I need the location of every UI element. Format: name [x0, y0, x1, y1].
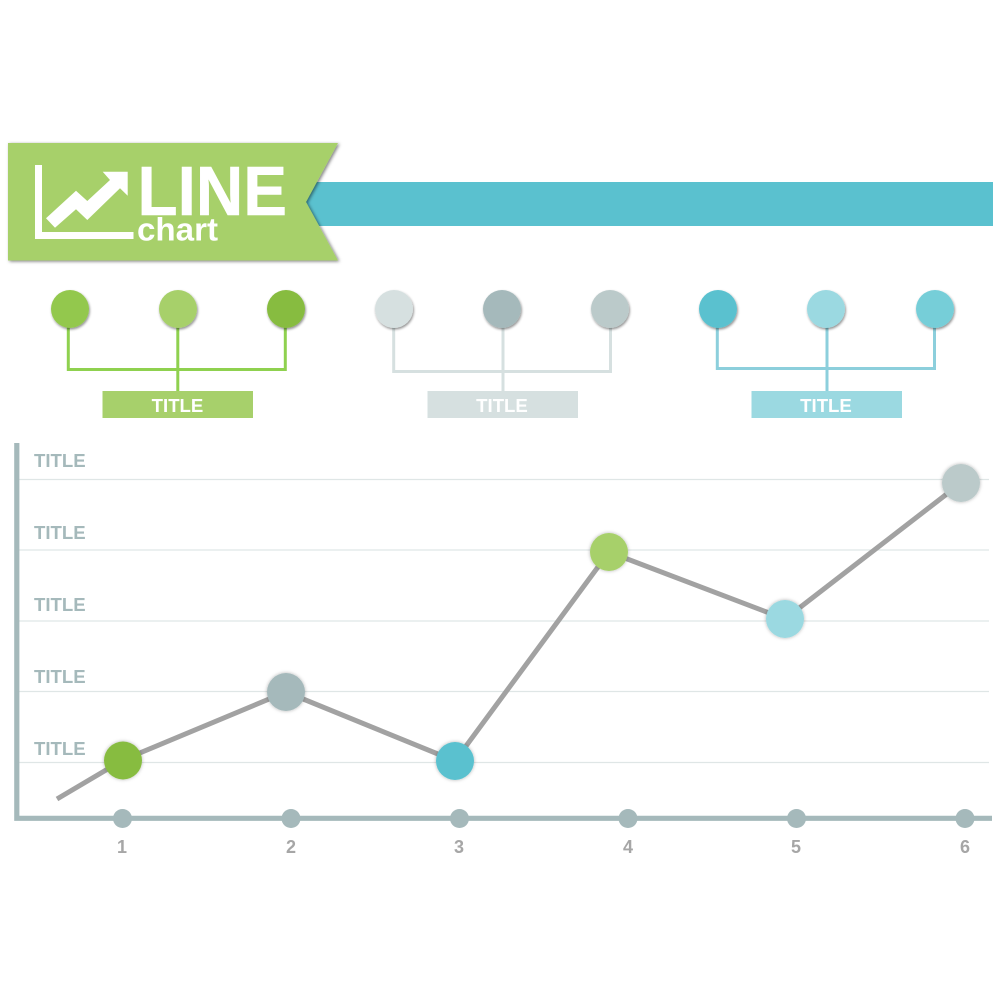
legend group: teal	[699, 290, 954, 418]
x axis labels: 6	[960, 837, 970, 857]
y axis labels: TITLE	[34, 666, 86, 687]
legend group: teal: TITLE	[800, 395, 852, 416]
y axis labels: TITLE	[34, 738, 86, 759]
x axis ticks	[113, 809, 974, 828]
legend group: grey: TITLE	[476, 395, 528, 416]
legend group: green	[51, 290, 305, 418]
y axis labels: TITLE	[34, 594, 86, 615]
y axis labels	[34, 450, 86, 759]
teal header bar	[300, 182, 993, 226]
green ribbon banner	[8, 143, 338, 260]
x axis labels: 1	[117, 837, 127, 857]
banner title: LINE	[138, 152, 287, 230]
legend group: green: TITLE	[152, 395, 203, 416]
x axis labels	[117, 837, 970, 857]
x axis labels: 5	[791, 837, 801, 857]
banner subtitle: chart	[137, 212, 218, 248]
y axis labels: TITLE	[34, 522, 86, 543]
y axis labels: TITLE	[34, 450, 86, 471]
x axis labels: 3	[454, 837, 464, 857]
x axis labels: 2	[286, 837, 296, 857]
line chart	[17, 443, 992, 857]
data line	[57, 483, 961, 799]
axes	[17, 443, 992, 818]
legend group: grey	[375, 290, 629, 418]
x axis labels: 4	[623, 837, 633, 857]
icon: rising line chart	[35, 165, 134, 239]
data points	[104, 464, 980, 780]
